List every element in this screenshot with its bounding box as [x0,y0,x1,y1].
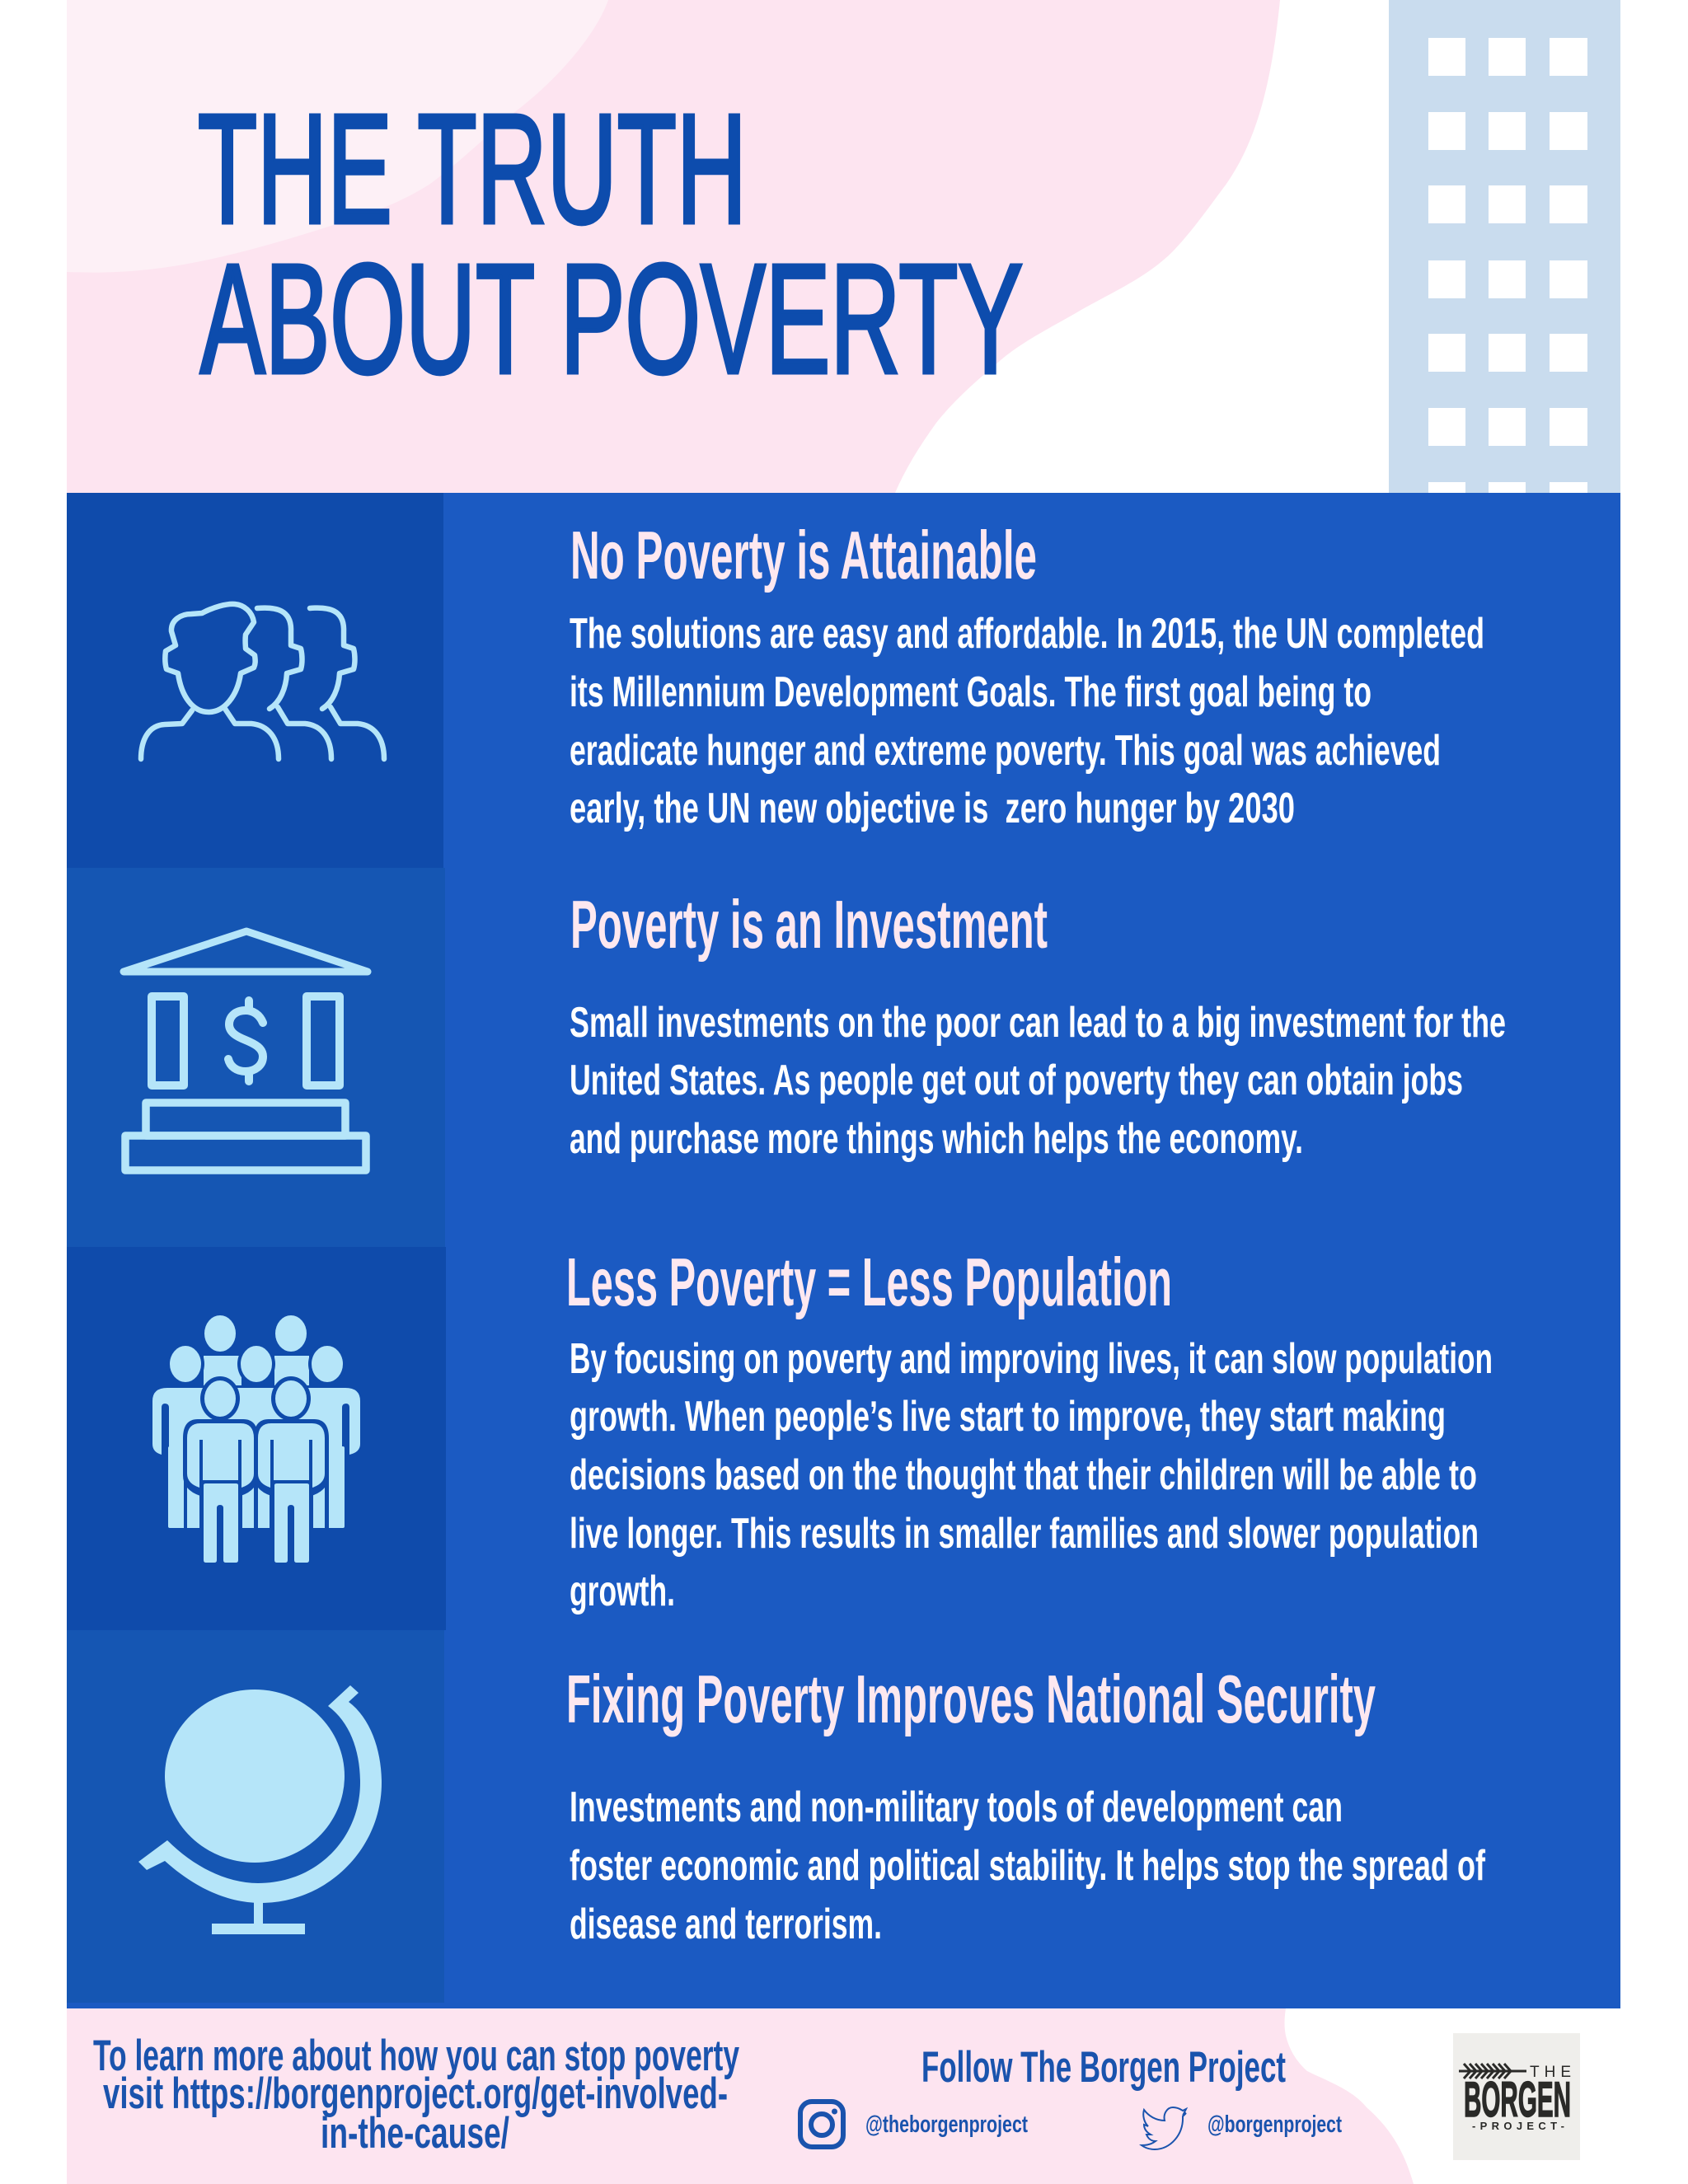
title [198,82,1023,406]
footer call to action: To learn more about how you can stop poverty [93,2032,739,2080]
twitter handle: @borgenproject [1207,2111,1342,2138]
section 4 body: disease and terrorism. [570,1900,882,1948]
footer call to action: in-the-cause/ [321,2109,509,2158]
logo: The Borgen Project: -PROJECT- [1472,2120,1564,2132]
section 2 heading: Poverty is an Investment [570,886,1048,963]
header background shape: light pink wave [67,0,608,273]
main blue panel [67,493,1620,2008]
header background shape: pink wave [67,0,1280,493]
title: ABOUT POVERTY [200,232,1023,406]
icon tile 4 [67,1630,444,2003]
title: THE TRUTH [198,82,747,256]
instagram handle: @theborgenproject [865,2111,1028,2138]
icon: instagram [800,2102,843,2147]
section 4 body: Investments and non-military tools of development can [570,1783,1343,1831]
icon tile 3 [67,1247,446,1630]
follow heading: Follow The Borgen Project [921,2043,1286,2092]
icon tile 2 [67,868,445,1247]
building illustration [1389,0,1620,493]
icon: group of people [152,1315,360,1563]
logo: The Borgen Project: THE [1530,2064,1571,2081]
section 1 body: early, the UN new objective is zero hunger by 2030 [570,785,1295,832]
icon tile 1 [67,493,443,868]
section 1 body [570,610,1484,832]
icon: twitter bird [1142,2107,1186,2149]
footer call to action: visit https://borgenproject.org/get-involved- [103,2069,728,2118]
section 3 body [570,1335,1493,1615]
logo: The Borgen Project [1453,2033,1580,2160]
footer pink wave [67,2008,1414,2184]
footer call to action [93,2032,739,2158]
section 4 body [570,1783,1485,1948]
section 2 body [570,999,1506,1163]
icon: bank with dollar sign [124,931,368,1170]
section 3 body: growth. [570,1568,675,1615]
section 2 body: and purchase more things which helps the economy. [570,1115,1303,1163]
section 3 heading: Less Poverty = Less Population [566,1244,1172,1320]
section 1 heading: No Poverty is Attainable [570,517,1037,593]
logo: The Borgen Project: BORGEN [1464,2072,1571,2127]
icon: globe [138,1685,382,1934]
icon: three people outline [141,604,384,759]
